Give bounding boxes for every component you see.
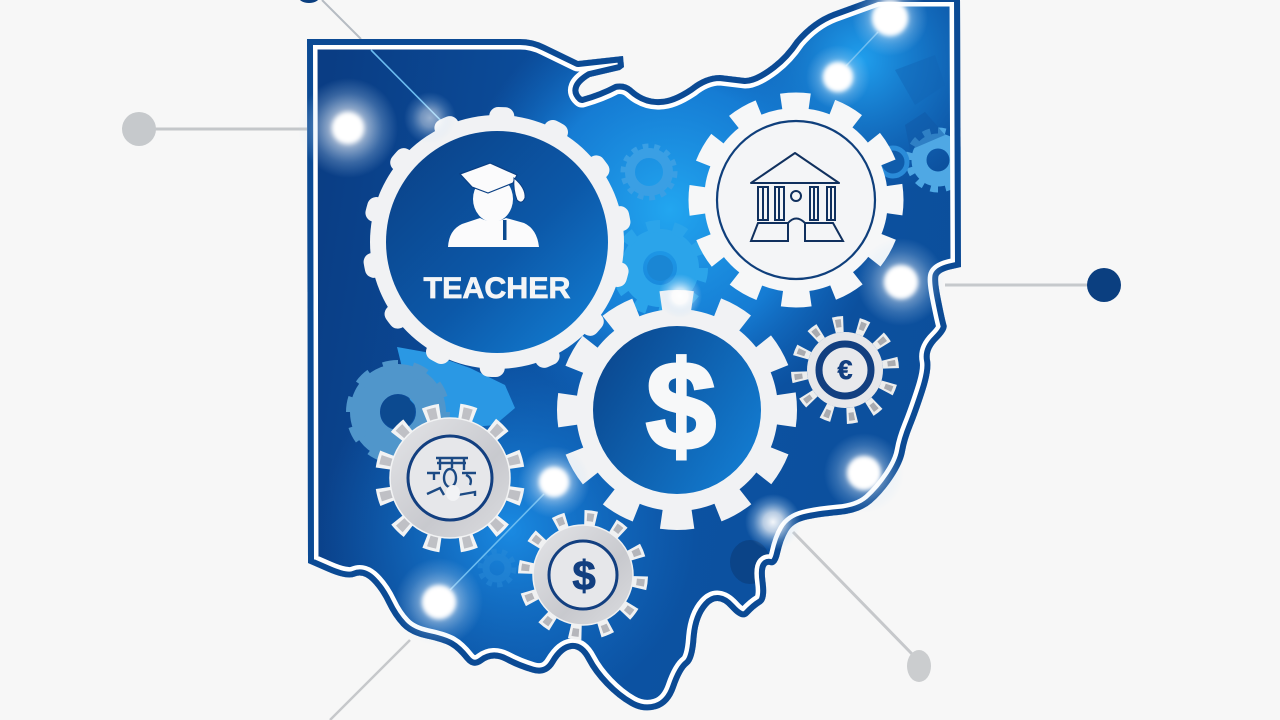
icon: background gear faint bottom	[480, 551, 514, 585]
node: top right	[852, 0, 928, 56]
icon: background gear centre	[618, 226, 702, 310]
map: Ohio state shape	[290, 0, 980, 720]
icon: euro sign: €	[837, 355, 853, 385]
gear: small dollar	[521, 513, 645, 637]
node: lower left	[395, 558, 483, 646]
inner white line and navy border	[307, 0, 961, 710]
node: top of dollar gear	[658, 274, 702, 318]
connector: lower-right grey line and dot	[793, 532, 931, 682]
label: TEACHER: TEACHER	[424, 272, 571, 305]
node: near teacher gear	[404, 92, 456, 144]
disc: teacher	[386, 131, 608, 353]
gear: dollar	[555, 288, 799, 532]
node: lower right	[824, 433, 904, 513]
icon: small dollar sign: $	[572, 552, 596, 599]
glowing nodes	[298, 0, 945, 646]
disc: dollar	[593, 326, 761, 494]
connector: left grey line and dot	[122, 112, 312, 146]
node: centre	[518, 446, 590, 518]
thin light trace lines	[371, 32, 878, 590]
icon: dollar sign: $	[646, 337, 716, 476]
icon: background gear left	[353, 347, 515, 457]
node: upper left	[298, 78, 398, 178]
dark spot lower right	[730, 540, 770, 584]
icon: graduate	[448, 163, 539, 247]
infographic canvas	[122, 0, 1121, 720]
ring: bank	[717, 121, 875, 279]
ring: seal	[408, 436, 492, 520]
connector: top-left navy dot and line	[298, 0, 361, 39]
gear: grey seal	[372, 400, 528, 556]
icon: seal emblem	[427, 458, 476, 496]
icon: background gears right	[879, 55, 966, 188]
connector: right navy dot and line	[945, 268, 1121, 302]
gear: bank	[686, 90, 906, 310]
ring: small dollar	[549, 541, 617, 609]
gear: teacher	[345, 90, 649, 394]
connector: bottom-left grey line	[330, 640, 410, 720]
ring: euro	[819, 344, 871, 396]
node: right middle	[857, 238, 945, 326]
icon: courthouse	[751, 153, 843, 241]
node: upper right small	[806, 45, 870, 109]
icon: background gear top centre	[624, 147, 674, 197]
gear: euro	[789, 314, 901, 426]
node: bottom right border	[745, 494, 801, 550]
